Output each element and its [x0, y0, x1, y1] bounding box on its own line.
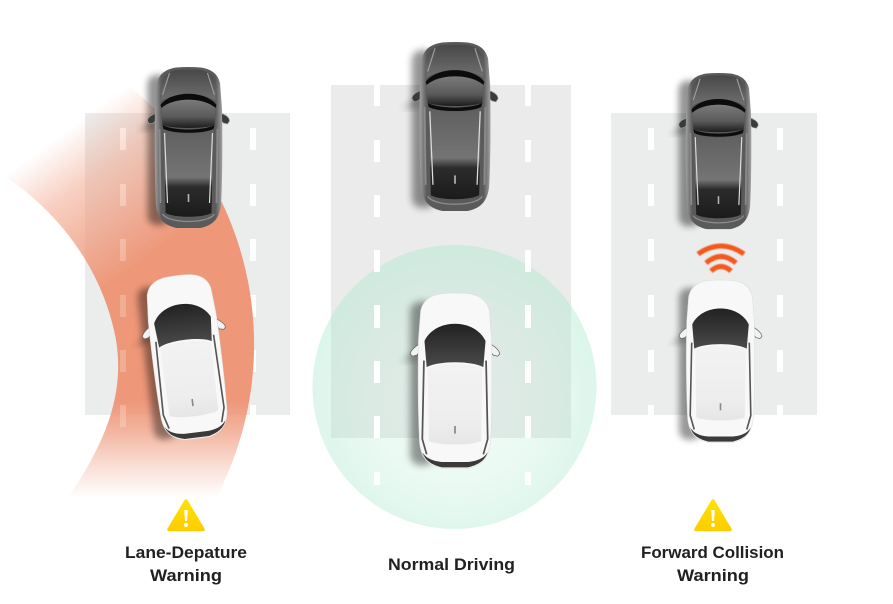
car: dark lead vehicle: [670, 73, 758, 229]
label: forward collision warning: Warning: [677, 567, 749, 585]
label: forward collision warning: [641, 544, 784, 585]
label: forward collision warning: Forward Collision: [641, 544, 784, 562]
label: lane-departure warning: Warning: [150, 567, 222, 585]
panel: normal driving: [312, 42, 596, 574]
panel: lane-departure warning: [11, 67, 290, 584]
road: right: [611, 113, 817, 415]
car: white drifting vehicle: [126, 270, 239, 445]
road: middle: [331, 85, 571, 438]
label: normal driving: Normal Driving: [388, 556, 515, 574]
car: dark lead vehicle: [138, 67, 230, 228]
car: white vehicle: [400, 293, 500, 468]
label: lane-departure warning: [125, 544, 247, 585]
lane dashes: left road: [120, 128, 256, 427]
car: dark lead vehicle: [402, 42, 498, 211]
road: left: [85, 113, 290, 415]
label: lane-departure warning: Lane-Depature: [125, 544, 247, 562]
icon: orange signal waves: [698, 246, 744, 271]
icon: warning triangle: [696, 501, 730, 530]
warning zone: red curved band: [11, 90, 254, 492]
panel: forward collision warning: [611, 73, 817, 585]
lane dashes: middle road: [374, 85, 531, 485]
safe zone: mint circle: [312, 245, 596, 529]
lane dashes: right road: [648, 128, 783, 427]
icon: warning triangle: [169, 501, 203, 530]
faint dashes over band: [120, 73, 126, 427]
car: white vehicle: [670, 280, 762, 443]
